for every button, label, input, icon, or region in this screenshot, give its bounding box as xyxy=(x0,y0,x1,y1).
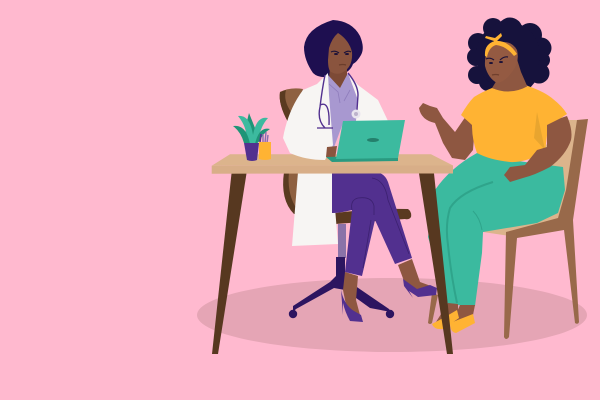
lower coat xyxy=(292,172,338,246)
hair xyxy=(467,18,552,91)
neck xyxy=(329,60,347,90)
pencil cup xyxy=(259,132,271,160)
trousers xyxy=(332,172,412,276)
patient figure xyxy=(419,18,572,333)
facial features xyxy=(331,51,351,53)
shoes xyxy=(432,310,459,329)
blouse xyxy=(326,73,358,150)
doctor legs xyxy=(292,172,437,322)
patient chair xyxy=(428,119,588,339)
feet xyxy=(436,303,458,322)
calves xyxy=(343,272,360,315)
lab coat xyxy=(283,73,388,160)
facial features xyxy=(486,57,508,60)
shirt xyxy=(461,86,567,162)
desk xyxy=(212,154,453,354)
laptop xyxy=(326,120,405,162)
floor shadow xyxy=(197,278,587,352)
potted plant xyxy=(233,113,270,161)
shoes xyxy=(341,290,363,322)
stethoscope xyxy=(319,73,358,128)
near arm xyxy=(504,116,572,182)
hair xyxy=(304,20,363,77)
headband xyxy=(485,41,517,57)
doctor torso xyxy=(283,20,388,160)
arm far xyxy=(419,103,475,160)
trousers xyxy=(428,153,565,306)
face xyxy=(328,33,352,74)
face xyxy=(485,42,518,83)
doctor chair xyxy=(280,88,411,318)
hand xyxy=(326,146,337,159)
neck xyxy=(492,56,528,92)
